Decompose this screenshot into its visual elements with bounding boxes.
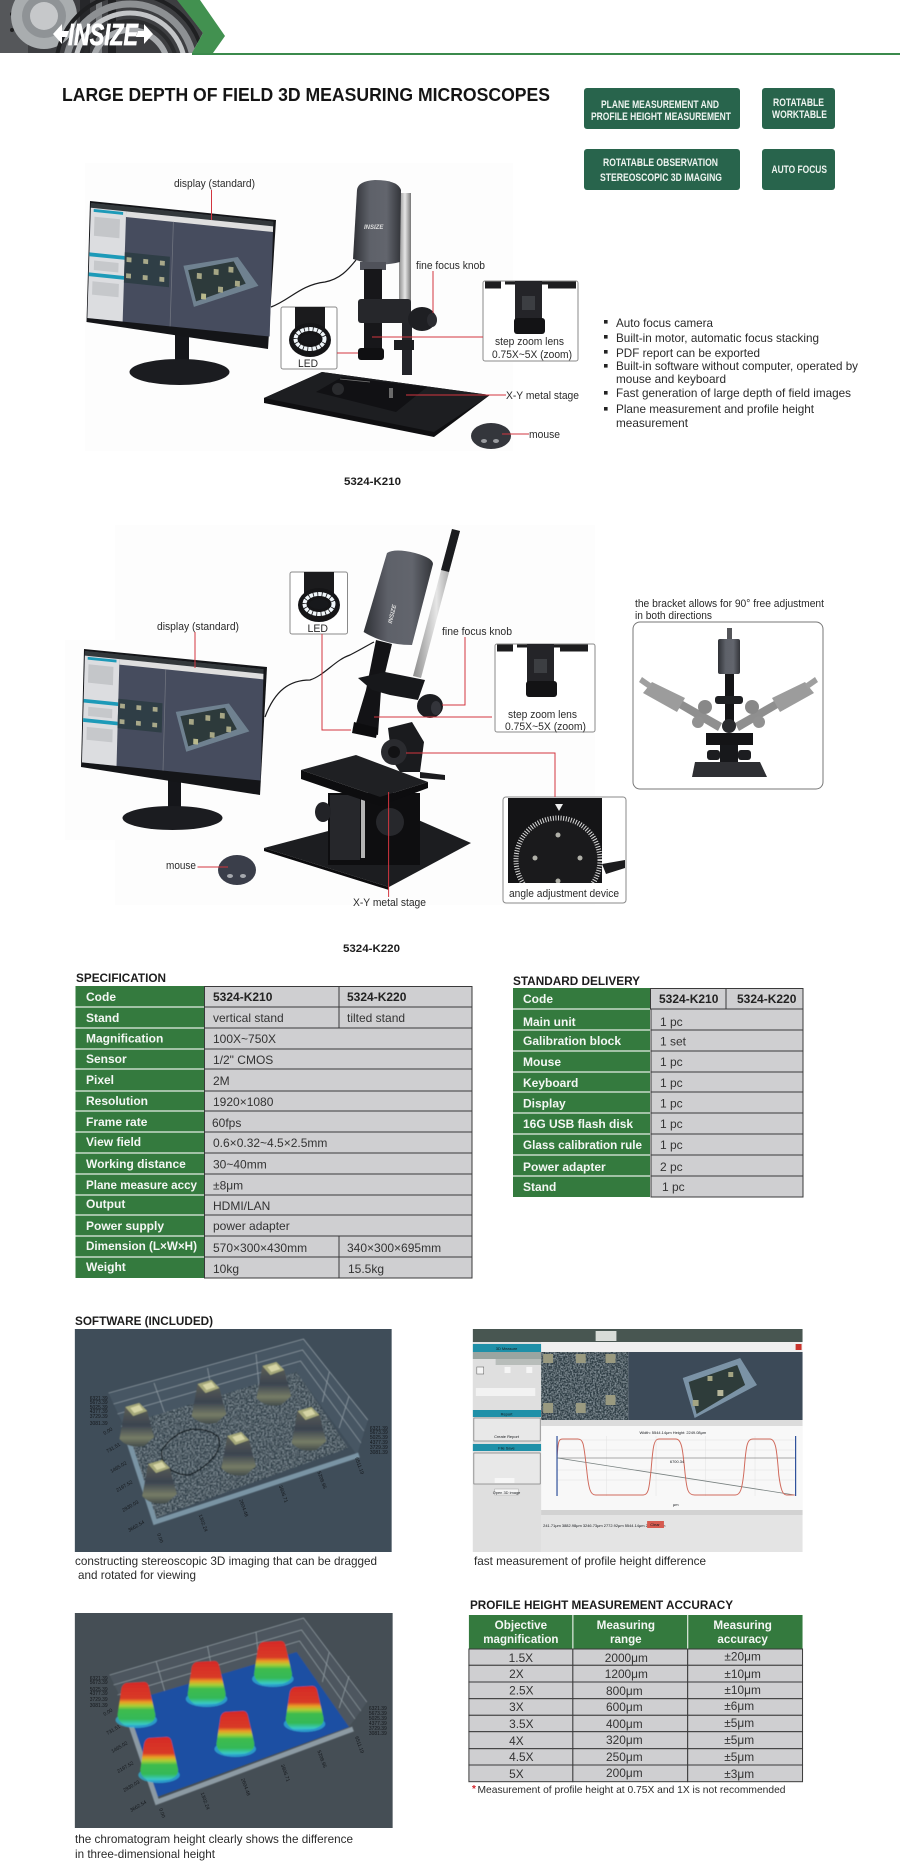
sample views xyxy=(541,1342,803,1420)
accuracy table: 2000μm xyxy=(605,1651,648,1665)
left control panel: Create Report xyxy=(494,1434,520,1439)
inset: LED: LED xyxy=(298,358,318,370)
feature list: Built-in software without computer, operated by xyxy=(616,359,858,373)
callout: X-Y metal stage xyxy=(353,792,426,909)
accuracy table: 1.5X xyxy=(509,1651,533,1665)
inset: step zoom lens: 0.75X~5X (zoom) xyxy=(505,721,586,733)
left control panel xyxy=(473,1342,541,1552)
specification table: Magnification xyxy=(86,1032,163,1046)
accuracy table: ±6μm xyxy=(724,1699,754,1713)
axis values: 5673.39 xyxy=(369,1711,387,1717)
accuracy table: ±10μm xyxy=(724,1683,761,1697)
caption: bracket adjustment: in both directions xyxy=(635,610,712,622)
logo: INSIZE: INSIZE xyxy=(68,17,139,52)
inset: angle adjustment device: angle adjustment device xyxy=(509,888,619,900)
profile chart: 6700.34 xyxy=(670,1459,685,1464)
axis values: 1465.02 xyxy=(109,1460,128,1475)
specification table: ±8μm xyxy=(213,1178,243,1192)
feature list: measurement xyxy=(616,416,689,430)
monitor xyxy=(81,642,374,830)
accuracy table xyxy=(469,1615,803,1782)
specification table: 5324-K210 xyxy=(213,990,273,1004)
upright camera xyxy=(715,628,743,733)
axis values: 0.00 xyxy=(103,1427,114,1437)
specification table: 340×300×695mm xyxy=(347,1241,441,1255)
specification table: 1/2" CMOS xyxy=(213,1053,273,1067)
caption: bracket adjustment: the bracket allows for 90° free adjustment xyxy=(635,598,824,610)
standard delivery table: Code xyxy=(523,992,553,1006)
axis values: 5673.39 xyxy=(90,1680,108,1686)
accuracy table: 2X xyxy=(509,1667,524,1681)
accuracy table: ±5μm xyxy=(724,1733,754,1747)
software heading: SOFTWARE (INCLUDED) xyxy=(75,1314,213,1328)
axis values: 3729.39 xyxy=(369,1726,387,1732)
stand xyxy=(692,733,767,777)
microscope xyxy=(264,180,490,437)
profile chart xyxy=(541,1420,803,1510)
callout: X-Y metal stage: X-Y metal stage xyxy=(506,390,579,402)
specification table: HDMI/LAN xyxy=(213,1199,270,1213)
standard delivery table: 1 pc xyxy=(660,1117,683,1131)
specification table: 0.6×0.32~4.5×2.5mm xyxy=(213,1136,327,1150)
standard delivery heading: STANDARD DELIVERY xyxy=(513,974,640,988)
axis values: 2604.48 xyxy=(237,1499,249,1518)
standard delivery table: 1 pc xyxy=(660,1138,683,1152)
standard delivery table: 5324-K220 xyxy=(737,992,797,1006)
product photo: 5324-K210 xyxy=(85,163,579,451)
specification table: Working distance xyxy=(86,1157,186,1171)
axis values: 0.00 xyxy=(157,1808,166,1819)
axis values: 6511.19 xyxy=(353,1457,365,1476)
feature badge: rotatable worktable: WORKTABLE xyxy=(772,109,827,121)
standard delivery table: 1 set xyxy=(660,1034,687,1048)
feature list: Plane measurement and profile height xyxy=(616,402,815,416)
callout: mouse: mouse xyxy=(166,860,196,872)
profile chart: Width: 5544.14μm Height: 2249.08μm xyxy=(640,1430,707,1435)
feature list xyxy=(604,316,858,430)
caption: bracket adjustment xyxy=(635,598,824,622)
standard delivery table xyxy=(513,988,803,1197)
specification table: Output xyxy=(86,1197,125,1211)
axis values: 2197.52 xyxy=(116,1760,135,1775)
axis values xyxy=(90,1396,388,1544)
specification table: Resolution xyxy=(86,1094,148,1108)
standard delivery table: 5324-K210 xyxy=(659,992,719,1006)
specification table: 60fps xyxy=(212,1116,241,1130)
left control panel: File Save xyxy=(498,1445,516,1451)
axis values: 731.51 xyxy=(106,1724,122,1737)
specification table: Stand xyxy=(86,1011,119,1025)
axis values: 6321.39 xyxy=(90,1676,108,1682)
tilted microscope: INSIZE xyxy=(388,603,399,624)
ghost camera: left xyxy=(639,677,722,731)
accuracy table: accuracy xyxy=(717,1632,768,1646)
standard delivery table: Main unit xyxy=(523,1015,576,1029)
axis values: 5208.95 xyxy=(316,1471,327,1490)
axis values: 5025.39 xyxy=(90,1405,108,1411)
monitor xyxy=(86,201,356,385)
left control panel: Open 3D image xyxy=(493,1490,521,1495)
axis values: 0.00 xyxy=(103,1708,114,1718)
axis values: 4377.39 xyxy=(90,1409,108,1415)
left control panel: 3D Measure xyxy=(496,1346,518,1351)
standard delivery table: Glass calibration rule xyxy=(523,1138,642,1152)
caption: chromatogram xyxy=(75,1832,353,1861)
axis values: 3729.39 xyxy=(90,1697,108,1703)
axis values: 6321.39 xyxy=(90,1396,108,1402)
axis values: 1465.02 xyxy=(110,1740,129,1755)
axis values: 3081.39 xyxy=(90,1421,108,1427)
axis values xyxy=(90,1676,387,1819)
callout: X-Y metal stage: X-Y metal stage xyxy=(353,897,426,909)
mouse xyxy=(218,855,256,885)
specification table: View field xyxy=(86,1135,141,1149)
accuracy table: 4X xyxy=(509,1734,524,1748)
ghost camera: right xyxy=(735,677,818,731)
caption: profile height: fast measurement of profile height difference xyxy=(474,1554,706,1568)
base and stage xyxy=(264,372,490,437)
standard delivery table: 1 pc xyxy=(662,1180,685,1194)
feature list: Built-in motor, automatic focus stacking xyxy=(616,331,819,345)
axis values: 6321.39 xyxy=(370,1426,388,1432)
accuracy table: 2.5X xyxy=(509,1683,534,1698)
result tabs: Clear xyxy=(650,1522,660,1527)
specification table: 100X~750X xyxy=(213,1032,276,1046)
accuracy table: Objective xyxy=(495,1618,547,1632)
specification table xyxy=(76,986,472,1278)
specification table: 5324-K220 xyxy=(347,990,407,1004)
axis values: 3729.39 xyxy=(90,1414,108,1420)
callout: fine focus knob: fine focus knob xyxy=(442,626,512,638)
callout: display: display (standard) xyxy=(174,178,255,190)
axis values: 3729.39 xyxy=(370,1445,388,1451)
3D image panel: stereoscopic view xyxy=(75,1329,392,1552)
standard delivery table: Stand xyxy=(523,1180,556,1194)
axis values: 3906.71 xyxy=(279,1764,291,1783)
accuracy table: 600μm xyxy=(606,1700,643,1714)
callout: mouse xyxy=(502,429,560,441)
callout: fine focus knob xyxy=(442,626,512,705)
specification table: tilted stand xyxy=(347,1011,405,1025)
footnote: * xyxy=(472,1784,476,1795)
photo panel: bracket rotation xyxy=(633,622,823,789)
feature badge: auto focus: AUTO FOCUS xyxy=(772,164,827,176)
axis values: 2604.48 xyxy=(239,1778,251,1797)
tilted microscope xyxy=(264,529,471,890)
axis values: 3662.54 xyxy=(129,1799,148,1814)
accuracy table: ±20μm xyxy=(724,1649,761,1664)
accuracy table: Measuring xyxy=(597,1618,655,1632)
feature badge: plane and profile measurement: PROFILE HEIGHT MEASUREMENT xyxy=(591,111,731,123)
left control panel: Report xyxy=(501,1411,513,1417)
accuracy table: 4.5X xyxy=(509,1750,534,1764)
accuracy table: 1200μm xyxy=(605,1667,648,1681)
callout: display xyxy=(157,621,239,668)
header banner xyxy=(0,0,900,55)
feature badge: rotatable worktable xyxy=(762,88,835,129)
feature badge: rotatable worktable: ROTATABLE xyxy=(773,97,824,109)
specification table: 2M xyxy=(213,1074,230,1088)
feature badge: rotatable observation: ROTATABLE OBSERVATION xyxy=(603,157,718,169)
feature badge: rotatable observation xyxy=(584,149,740,190)
accuracy table: 5X xyxy=(509,1767,524,1781)
accuracy table: Measuring xyxy=(713,1618,772,1632)
axis values: 3662.54 xyxy=(127,1519,146,1534)
specification table: 10kg xyxy=(213,1262,239,1276)
axis values: 4377.39 xyxy=(370,1440,388,1446)
axis values: 5673.39 xyxy=(370,1430,388,1436)
feature badge: plane and profile measurement xyxy=(584,88,740,129)
standard delivery table: 2 pc xyxy=(660,1160,683,1174)
mouse xyxy=(471,423,511,449)
standard delivery table: 1 pc xyxy=(660,1015,683,1029)
inset: step zoom lens: 0.75X~5X (zoom) xyxy=(492,349,572,361)
inset: LED xyxy=(290,572,351,730)
standard delivery table: 1 pc xyxy=(660,1055,683,1069)
accuracy table: 3.5X xyxy=(509,1717,534,1731)
accuracy table: 3X xyxy=(509,1700,524,1714)
axis values: 3081.39 xyxy=(90,1703,108,1709)
standard delivery table: Display xyxy=(523,1096,566,1110)
axis values: 731.51 xyxy=(106,1442,122,1455)
callout: mouse xyxy=(166,860,228,872)
axis values: 3081.39 xyxy=(370,1450,388,1456)
accuracy heading: PROFILE HEIGHT MEASUREMENT ACCURACY xyxy=(470,1598,733,1612)
accuracy table: magnification xyxy=(483,1632,559,1646)
specification table: Weight xyxy=(86,1260,126,1274)
microscope: INSIZE xyxy=(364,225,384,231)
feature list: mouse and keyboard xyxy=(616,372,726,386)
model label: 5324-K220: 5324-K220 xyxy=(343,943,400,955)
specification table: 15.5kg xyxy=(348,1262,384,1276)
axis values: 5025.39 xyxy=(370,1435,388,1441)
axis values: 4377.39 xyxy=(369,1721,387,1727)
axis values: 0.00 xyxy=(155,1533,164,1544)
product photo: 5324-K220 xyxy=(65,525,626,909)
axis values: 1302.24 xyxy=(197,1514,209,1533)
feature badge: plane and profile measurement: PLANE MEASUREMENT AND xyxy=(601,99,719,111)
result tabs: 241.71μm 3882.98μm 3246.73μm 2772.92μm 5544.14μm 2249.08μm xyxy=(543,1523,666,1528)
axis values: 2930.03 xyxy=(122,1779,141,1794)
axis values: 5673.39 xyxy=(90,1400,108,1406)
axis values: 2930.03 xyxy=(121,1499,140,1514)
inset: step zoom lens: step zoom lens xyxy=(508,709,577,721)
accuracy table: 200μm xyxy=(606,1766,643,1780)
accuracy table: ±10μm xyxy=(724,1667,761,1681)
caption: chromatogram: the chromatogram height clearly shows the difference xyxy=(75,1832,353,1846)
title: LARGE DEPTH OF FIELD 3D MEASURING MICROSCOPES xyxy=(62,85,550,105)
specification table: Code xyxy=(86,990,116,1004)
chromatogram panel xyxy=(75,1613,393,1828)
specification table: Pixel xyxy=(86,1073,114,1087)
feature list: PDF report can be exported xyxy=(616,346,760,360)
callout: display: display (standard) xyxy=(157,621,239,633)
inset: step zoom lens xyxy=(372,281,578,361)
axis values: 5025.39 xyxy=(369,1716,387,1722)
feature badge: auto focus xyxy=(762,149,835,190)
tilted stand base xyxy=(264,812,471,887)
axis values: 1302.24 xyxy=(199,1792,211,1811)
accuracy table: ±3μm xyxy=(724,1767,754,1781)
caption: 3D imaging: and rotated for viewing xyxy=(78,1568,196,1582)
footnote: Measurement of profile height at 0.75X and 1X is not recommended xyxy=(478,1784,786,1796)
axis values: 6511.19 xyxy=(353,1736,365,1755)
accuracy table: ±5μm xyxy=(724,1716,754,1730)
accuracy table: range xyxy=(610,1632,642,1646)
specification table: 570×300×430mm xyxy=(213,1241,307,1255)
specification table: Power supply xyxy=(86,1219,164,1233)
accuracy table: 250μm xyxy=(606,1750,643,1764)
standard delivery table: 1 pc xyxy=(660,1076,683,1090)
axis values: 5025.39 xyxy=(90,1687,108,1693)
caption: 3D imaging xyxy=(75,1554,377,1582)
axis values: 5208.95 xyxy=(316,1750,327,1769)
specification table: Sensor xyxy=(86,1052,127,1066)
software screenshot: profile measurement xyxy=(473,1329,803,1552)
feature list: Auto focus camera xyxy=(616,316,713,330)
inset: step zoom lens: step zoom lens xyxy=(495,336,564,348)
callout: display xyxy=(174,178,255,220)
axis values: 2197.52 xyxy=(115,1479,134,1494)
specification table: Plane measure accy xyxy=(86,1178,197,1192)
caption: 3D imaging: constructing stereoscopic 3D imaging that can be dragged xyxy=(75,1554,377,1568)
standard delivery table: 1 pc xyxy=(660,1096,683,1110)
accuracy table: ±5μm xyxy=(724,1750,754,1764)
inset: LED: LED xyxy=(308,623,328,635)
standard delivery table: 16G USB flash disk xyxy=(523,1117,633,1131)
specification table: 30~40mm xyxy=(213,1158,267,1172)
accuracy table: 320μm xyxy=(606,1733,643,1747)
accuracy table: 800μm xyxy=(606,1684,643,1698)
accuracy table: 400μm xyxy=(606,1717,643,1731)
specification table: vertical stand xyxy=(213,1011,284,1025)
specification heading: SPECIFICATION xyxy=(76,971,166,985)
model label: 5324-K210: 5324-K210 xyxy=(344,476,401,488)
profile chart: μm xyxy=(673,1502,679,1507)
inset: LED xyxy=(281,307,358,370)
inset: step zoom lens xyxy=(374,644,595,733)
axis values: 3906.71 xyxy=(277,1485,289,1504)
feature list: Fast generation of large depth of field images xyxy=(616,386,851,400)
inset: angle adjustment device xyxy=(406,753,626,903)
callout: mouse: mouse xyxy=(529,429,560,441)
feature badge: rotatable observation: STEREOSCOPIC 3D IMAGING xyxy=(600,172,722,184)
specification table: Dimension (L×W×H) xyxy=(86,1239,197,1253)
standard delivery table: Keyboard xyxy=(523,1076,578,1090)
specification table: power adapter xyxy=(213,1219,290,1233)
standard delivery table: Mouse xyxy=(523,1055,561,1069)
callout: fine focus knob xyxy=(416,260,485,313)
specification table: 1920×1080 xyxy=(213,1095,274,1109)
axis values: 3081.39 xyxy=(369,1731,387,1737)
specification table: Frame rate xyxy=(86,1115,148,1129)
standard delivery table: Galibration block xyxy=(523,1034,621,1048)
standard delivery table: Power adapter xyxy=(523,1160,606,1174)
caption: chromatogram: in three-dimensional height xyxy=(75,1847,216,1861)
callout: fine focus knob: fine focus knob xyxy=(416,260,485,272)
axis values: 4377.39 xyxy=(90,1691,108,1697)
axis values: 6321.39 xyxy=(369,1706,387,1712)
result tabs xyxy=(541,1510,803,1552)
